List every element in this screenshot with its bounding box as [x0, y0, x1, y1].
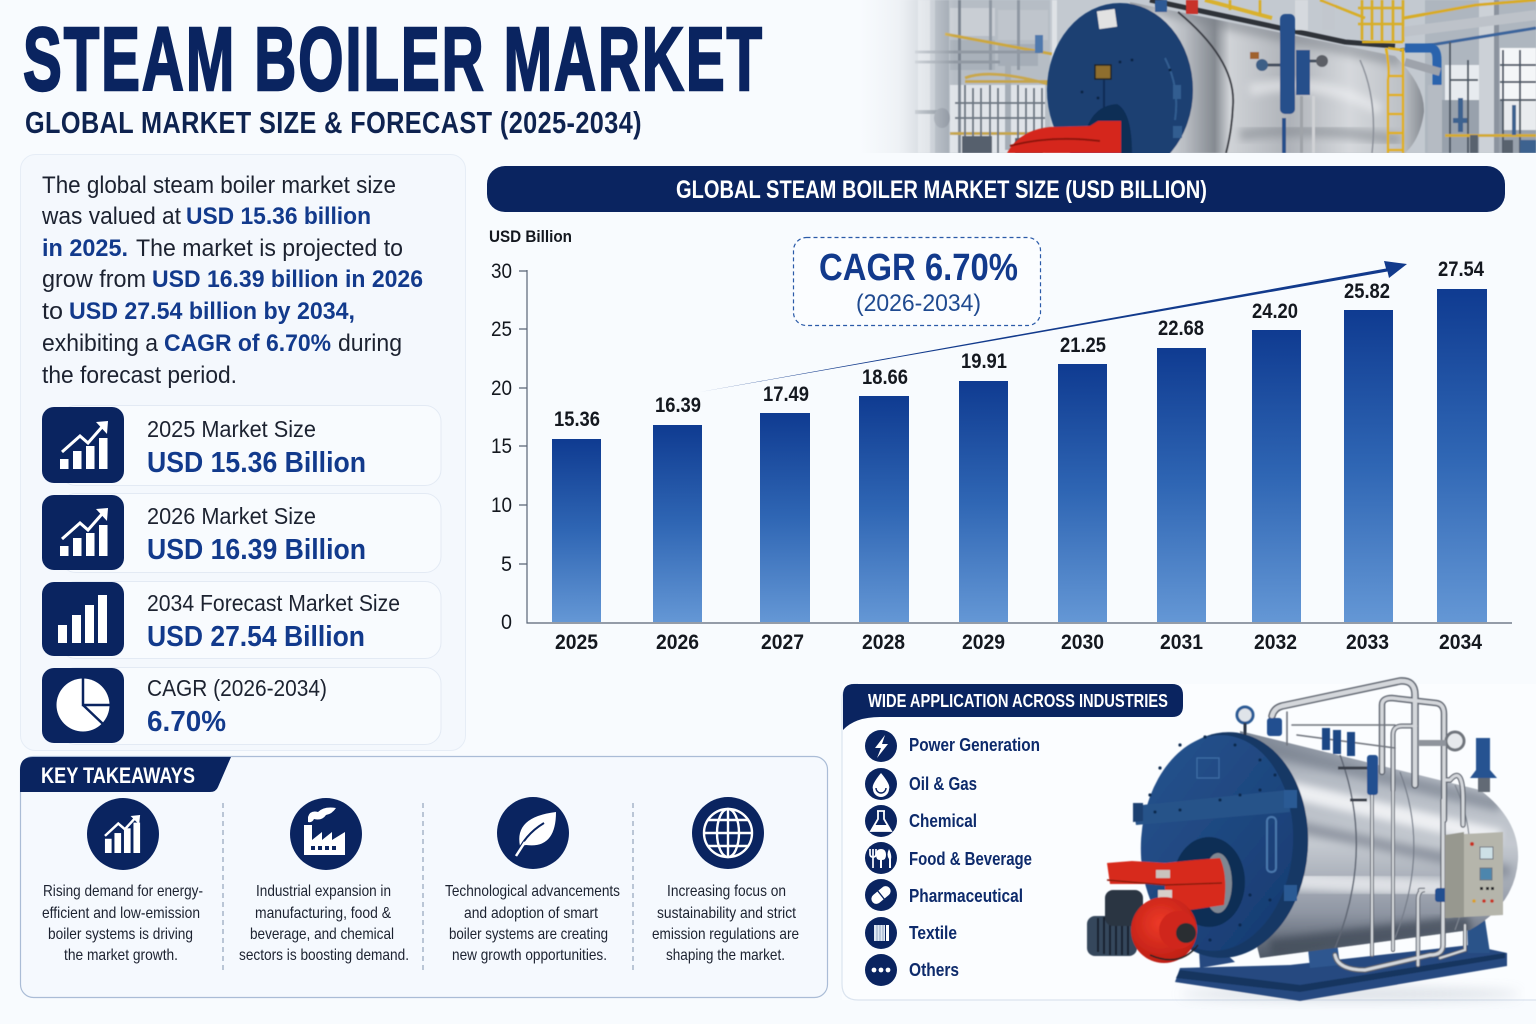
stat card: 2025 market size: USD 15.36 Billion [147, 447, 366, 479]
value labels: 16.39 [655, 394, 701, 417]
overview paragraph: CAGR of 6.70% [164, 330, 331, 357]
key takeaways heading [20, 757, 231, 792]
takeaway: industrial expansion: manufacturing, food & [255, 905, 391, 922]
item: food and beverage: Food & Beverage [909, 849, 1032, 869]
year labels: 2031 [1160, 631, 1203, 654]
item: power generation [865, 730, 1040, 762]
front face [1134, 726, 1316, 964]
value labels: 19.91 [961, 350, 1007, 373]
takeaway: technology: boiler systems are creating [449, 926, 608, 943]
base frame [1175, 945, 1507, 1001]
applications heading: WIDE APPLICATION ACROSS INDUSTRIES [868, 690, 1168, 711]
stat card: CAGR: CAGR (2026-2034) [147, 675, 327, 701]
stat card: CAGR: 6.70% [147, 706, 226, 738]
value labels: 25.82 [1344, 280, 1390, 303]
takeaway: sustainability: shaping the market. [666, 947, 785, 964]
stat card: 2025 market size: 2025 Market Size [147, 416, 316, 442]
takeaway: technology: new growth opportunities. [452, 947, 607, 964]
bar chart: USD Billion [489, 227, 572, 246]
chart header bar [487, 166, 1505, 212]
overview paragraph: The global steam boiler market size [42, 172, 396, 199]
left plant background [932, 0, 1050, 152]
stat card: 2026 market size: USD 16.39 Billion [147, 534, 366, 566]
takeaway: sustainability: Increasing focus on [667, 883, 786, 900]
y axis labels [491, 260, 512, 634]
chart header bar: GLOBAL STEAM BOILER MARKET SIZE (USD BILLION) [676, 176, 1207, 204]
overview paragraph: USD 15.36 billion [186, 203, 371, 230]
CAGR callout: (2026-2034) [856, 290, 981, 317]
overview paragraph: in 2025. [42, 235, 128, 262]
year labels [555, 631, 1482, 654]
year labels: 2034 [1439, 631, 1482, 654]
year labels: 2032 [1254, 631, 1297, 654]
illustration: steam boiler [1087, 681, 1520, 1001]
takeaway: sustainability: sustainability and strict [657, 905, 796, 922]
ladder [1362, 42, 1403, 153]
item: others: Others [909, 960, 959, 980]
shell [1240, 731, 1518, 958]
y axis labels: 20 [491, 377, 512, 400]
item: textile [865, 917, 957, 949]
y axis labels: 5 [501, 553, 512, 576]
takeaway: sustainability [652, 797, 799, 964]
takeaway: technology: and adoption of smart [464, 905, 598, 922]
takeaway: industrial expansion: beverage, and chemical [250, 926, 394, 943]
takeaway: demand: efficient and low-emission [42, 905, 200, 922]
overview paragraph: to [42, 298, 63, 325]
stat card: CAGR [42, 668, 441, 744]
stat card: 2025 market size [42, 406, 441, 486]
stat card: 2034 forecast [42, 582, 441, 658]
takeaway: industrial expansion: sectors is boosting demand. [239, 947, 409, 964]
applications heading [843, 684, 1183, 730]
overview paragraph: USD 16.39 billion in 2026 [152, 266, 423, 293]
takeaway: demand: the market growth. [64, 947, 178, 964]
year labels: 2025 [555, 631, 598, 654]
y axis labels: 15 [491, 435, 512, 458]
y axis labels: 30 [491, 260, 512, 283]
value labels: 27.54 [1438, 258, 1484, 281]
CAGR callout: CAGR 6.70% [819, 247, 1018, 289]
burner [1087, 916, 1137, 956]
shell [1125, 2, 1424, 153]
overview paragraph: The market is projected to [136, 235, 403, 262]
burner port [1173, 837, 1245, 927]
overview paragraph: the forecast period. [42, 362, 237, 389]
year labels: 2026 [656, 631, 699, 654]
item: power generation: Power Generation [909, 735, 1040, 755]
takeaway: industrial expansion [239, 798, 409, 964]
burner [1007, 121, 1121, 153]
valves and gauges [1237, 707, 1253, 723]
takeaway: sustainability: emission regulations are [652, 926, 799, 943]
item: chemical [865, 805, 977, 837]
steel pipework [1272, 681, 1465, 970]
value labels: 15.36 [554, 408, 600, 431]
trend arrow [700, 261, 1407, 392]
takeaway: demand [42, 798, 203, 964]
valves [1280, 14, 1295, 114]
item: pharmaceutical: Pharmaceutical [909, 886, 1023, 906]
panel: applications [842, 684, 1536, 1000]
stat card: 2026 market size: 2026 Market Size [147, 503, 316, 529]
fade to white [860, 0, 955, 153]
item: food and beverage [865, 842, 1032, 874]
front face [1046, 2, 1194, 153]
year labels: 2027 [761, 631, 804, 654]
title: STEAM BOILER MARKET [23, 10, 764, 110]
takeaway: industrial expansion: Industrial expansion in [256, 883, 391, 900]
stat card: 2026 market size [42, 494, 441, 572]
value labels: 24.20 [1252, 300, 1298, 323]
value labels: 21.25 [1060, 334, 1106, 357]
item: pharmaceutical [865, 879, 1023, 911]
takeaway: demand: boiler systems is driving [48, 926, 193, 943]
item: oil and gas [865, 768, 977, 800]
bar chart [489, 227, 1512, 654]
year labels: 2030 [1061, 631, 1104, 654]
panel: market overview [20, 154, 466, 750]
overview paragraph: during [338, 330, 402, 357]
stat card: 2034 forecast: 2034 Forecast Market Size [147, 590, 400, 616]
value labels: 18.66 [862, 366, 908, 389]
panel: key takeaways [20, 756, 828, 998]
bars [552, 289, 1487, 622]
item: chemical: Chemical [909, 811, 977, 831]
header photo: industrial boiler [893, 0, 1536, 153]
overview paragraph: exhibiting a [42, 330, 159, 357]
year labels: 2028 [862, 631, 905, 654]
year labels: 2033 [1346, 631, 1389, 654]
y axis labels: 25 [491, 318, 512, 341]
overview paragraph: grow from [42, 266, 146, 293]
takeaway: technology [445, 797, 620, 964]
upper structure [1150, 0, 1395, 46]
overview paragraph [41, 172, 423, 389]
subtitle: GLOBAL MARKET SIZE & FORECAST (2025-2034) [25, 105, 642, 140]
overview paragraph: USD 27.54 billion by 2034, [69, 298, 355, 325]
overview paragraph: was valued at [41, 203, 181, 230]
value labels: 17.49 [763, 383, 809, 406]
control panel [1445, 832, 1503, 918]
takeaway: demand: Rising demand for energy- [43, 883, 203, 900]
item: oil and gas: Oil & Gas [909, 774, 977, 794]
item: textile: Textile [909, 923, 957, 943]
value labels [554, 258, 1484, 431]
takeaway: technology: Technological advancements [445, 883, 620, 900]
right plant background [1425, 0, 1536, 153]
y axis labels: 0 [501, 611, 512, 634]
CAGR callout [794, 238, 1040, 326]
y axis labels: 10 [491, 494, 512, 517]
value labels: 22.68 [1158, 317, 1204, 340]
year labels: 2029 [962, 631, 1005, 654]
stat card: 2034 forecast: USD 27.54 Billion [147, 621, 365, 653]
key takeaways heading: KEY TAKEAWAYS [41, 763, 195, 788]
item: others [865, 954, 959, 986]
